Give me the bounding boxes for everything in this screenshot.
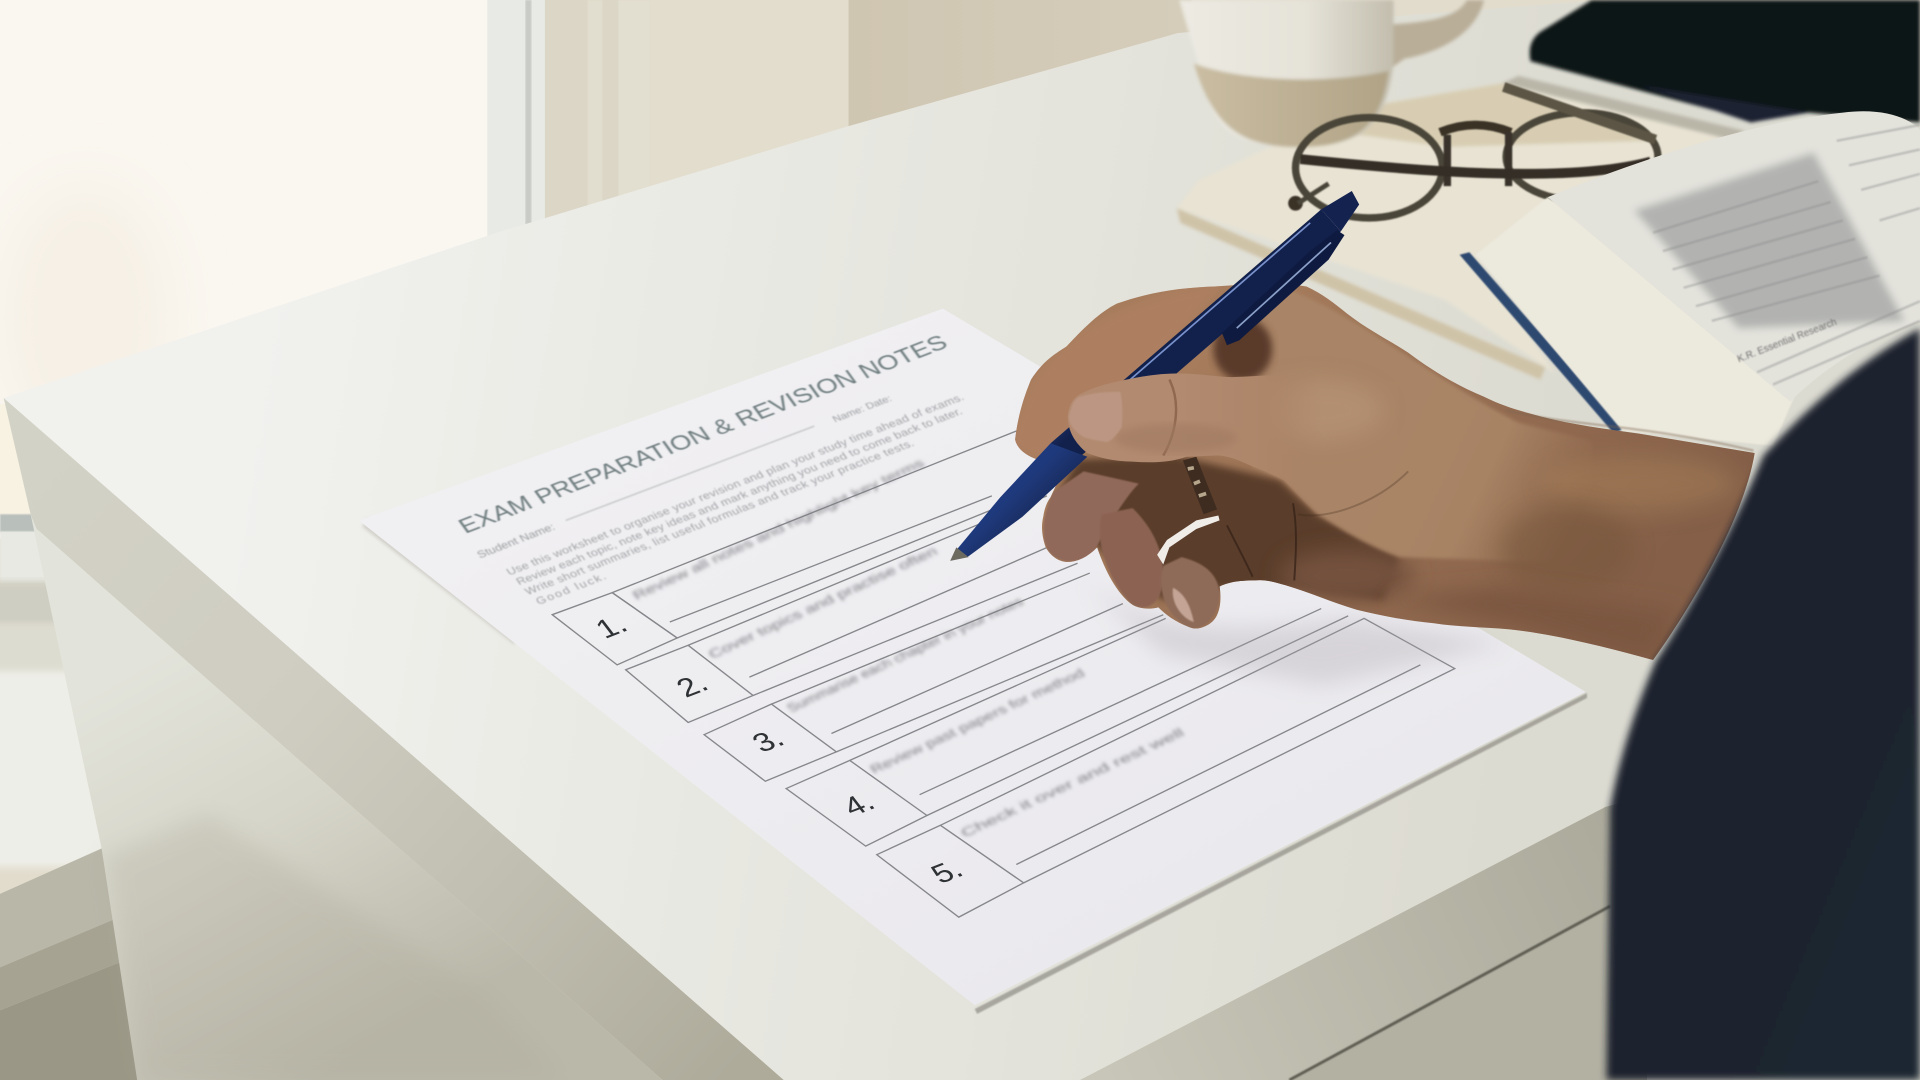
desk side shadow — [104, 814, 563, 1080]
desk left lip — [4, 398, 784, 1080]
wall panel left — [650, 0, 852, 208]
ring finger — [1161, 557, 1220, 628]
sheet name field — [475, 394, 894, 561]
wedding ring — [1183, 457, 1217, 514]
hand — [1010, 282, 1755, 661]
thumb shading — [1114, 424, 1237, 453]
blurred row captions — [630, 457, 1187, 840]
book cover spine — [1460, 252, 1624, 433]
hand silhouette — [1015, 284, 1755, 660]
box numbers — [590, 610, 969, 889]
sheet name field: Student Name: — [475, 522, 557, 561]
blurred row captions: Review all notes and highlight key terms — [630, 457, 928, 603]
wrist lit area — [1564, 458, 1732, 512]
wrist lower tone — [1426, 588, 1670, 660]
pen clip — [1222, 230, 1344, 345]
box numbers: 2. — [671, 669, 714, 703]
middle finger — [1100, 508, 1163, 607]
sheet intro text: Good luck. — [534, 572, 609, 607]
blurred row captions: Check it over and rest well — [958, 726, 1187, 840]
dark gap behind pen — [1213, 317, 1272, 381]
glasses — [1288, 87, 1658, 218]
window sill and lower left wall — [0, 404, 159, 1080]
book open page — [1548, 111, 1920, 402]
pen highlights — [1130, 223, 1331, 380]
wall panel right — [849, 0, 1191, 135]
coffee mug — [1179, 0, 1484, 147]
thumb nail — [1069, 392, 1122, 442]
book small heading: K.R. Essential Research — [1736, 317, 1838, 365]
pen barrel upper — [1051, 209, 1341, 465]
pen lower barrel — [958, 443, 1087, 557]
sheet name field: Name: Date: — [831, 394, 894, 425]
thumb — [1068, 373, 1329, 527]
window warm glow — [0, 184, 171, 453]
book text lines — [1653, 125, 1920, 384]
box numbers: 1. — [590, 610, 634, 644]
sheet title: EXAM PREPARATION & REVISION NOTES — [454, 331, 952, 538]
palm creases — [1227, 471, 1408, 580]
book text block — [1635, 153, 1904, 328]
thumb knuckle crease — [1163, 380, 1176, 456]
blurred row captions: Cover topics and practise often — [706, 545, 941, 661]
index finger light — [1010, 282, 1224, 459]
window glass — [0, 0, 497, 539]
pen nib — [950, 547, 969, 561]
light gap between fingers — [1157, 516, 1220, 564]
pen cap end — [1321, 191, 1359, 231]
box numbers: 3. — [747, 724, 790, 758]
lower palm tone — [1280, 549, 1414, 602]
open book — [1460, 111, 1920, 446]
hand shadow on paper — [1078, 576, 1506, 686]
row lines and boxes — [552, 429, 1455, 917]
sheet intro text: Write short summaries, list useful formulas and track your practice tests. — [523, 438, 917, 597]
window frame — [487, 0, 653, 282]
forearm hair — [1506, 410, 1753, 451]
box numbers: 5. — [925, 855, 969, 889]
sheet intro text: Review each topic, note key ideas and mark anything you need to come back to later. — [514, 406, 965, 588]
desk front panel right — [1080, 796, 1647, 1080]
book page block — [1476, 197, 1794, 446]
desk drawer seam and front — [1289, 906, 1647, 1080]
dark object top right — [1530, 0, 1920, 122]
blurred row captions: Summarise each chapter in your notes — [784, 595, 1027, 715]
knuckle highlight — [1303, 386, 1373, 434]
sheet intro text: Use this worksheet to organise your revision and plan your study time ahead of exams. — [505, 392, 966, 578]
ring fingernail — [1173, 588, 1194, 622]
exam notes sheet — [359, 309, 1586, 1005]
notebook under glasses — [1177, 76, 1745, 380]
lower index finger — [1044, 471, 1139, 561]
back of hand lit area — [1255, 292, 1572, 560]
box numbers: 4. — [837, 788, 881, 822]
dark sleeve — [1607, 328, 1920, 1080]
paper shadow — [362, 518, 1587, 1014]
blurred row captions: Review past papers for method — [868, 667, 1088, 776]
wrist shadow — [1498, 504, 1626, 584]
desk cabinet side — [31, 514, 662, 1080]
pen — [950, 191, 1359, 561]
dark palm and finger shadow — [1053, 456, 1400, 600]
